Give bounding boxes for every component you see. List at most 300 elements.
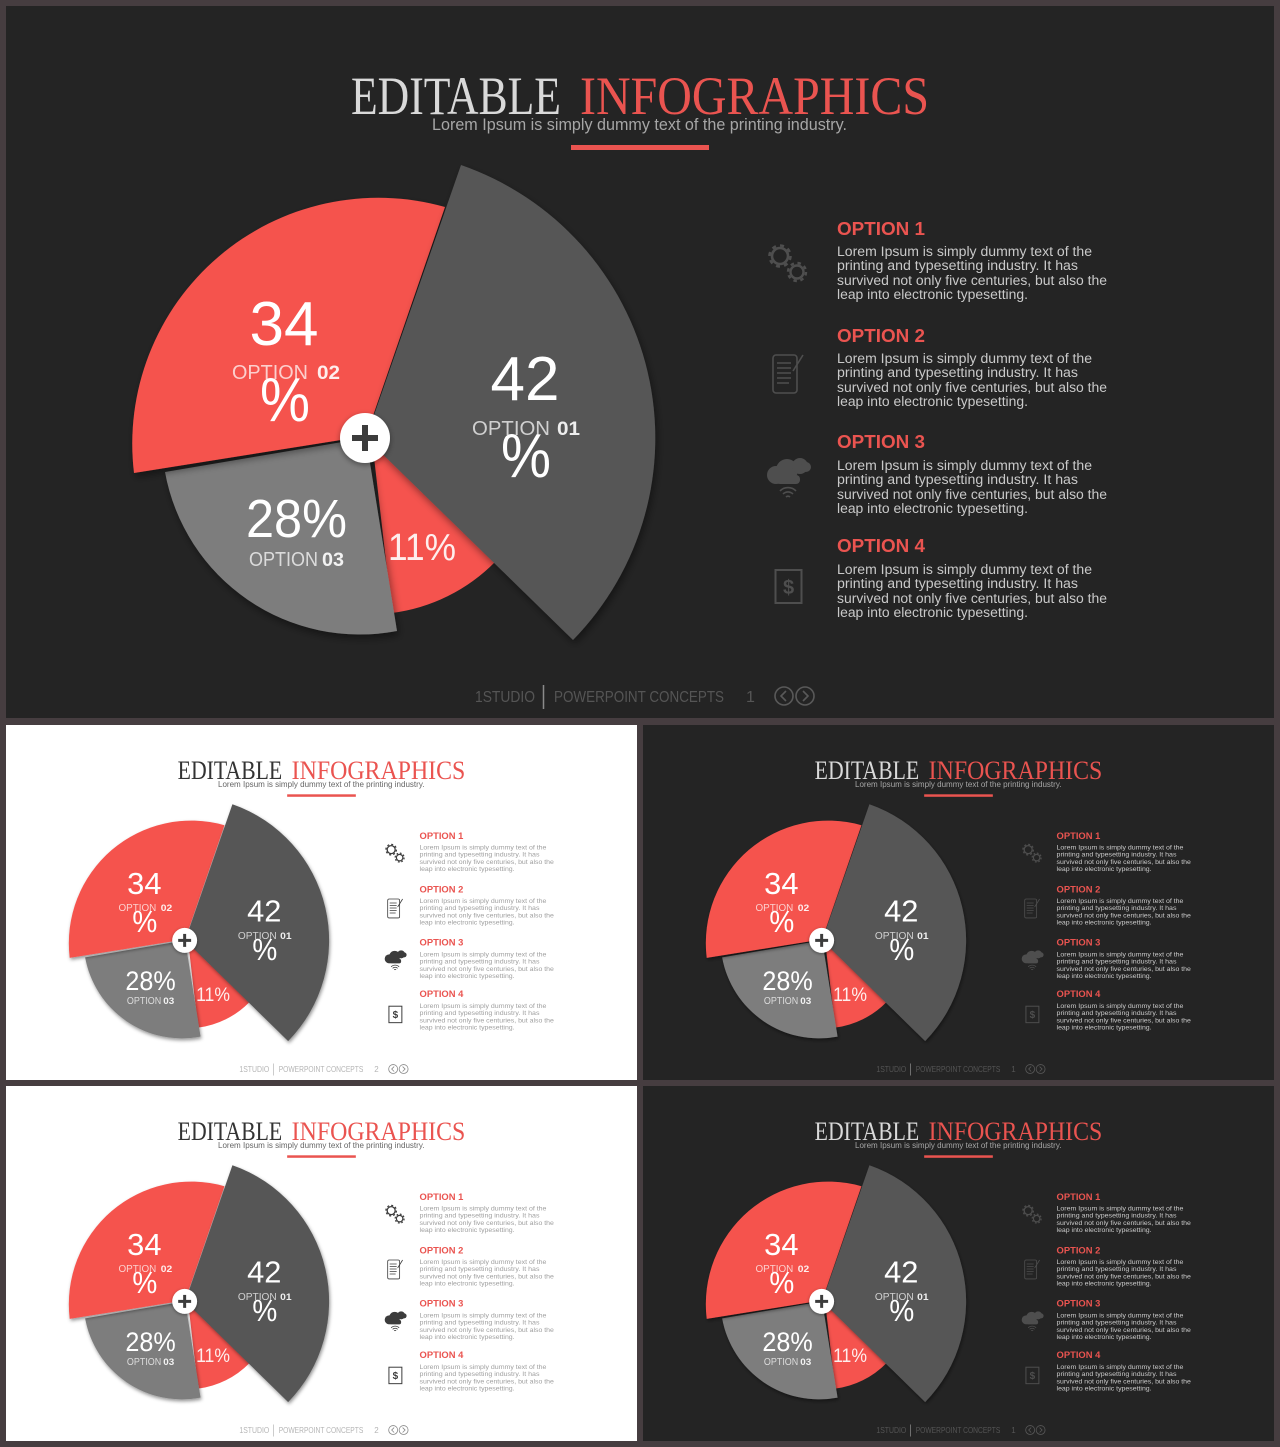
label: 11%: 11% bbox=[833, 1346, 867, 1367]
option 3 text: OPTION 3 bbox=[1057, 937, 1100, 947]
pie chart bbox=[706, 804, 966, 1041]
option 1 text bbox=[420, 831, 554, 873]
title bbox=[815, 755, 1102, 785]
label: 34% option 02 bbox=[232, 290, 340, 435]
option 2 text bbox=[837, 325, 1107, 409]
option 1 text: printing and typesetting industry. It has bbox=[1057, 852, 1177, 859]
footer bbox=[239, 1064, 408, 1076]
label: 28% option 03 bbox=[762, 1327, 813, 1368]
icon: gears bbox=[1023, 844, 1041, 862]
option 4 text: leap into electronic typesetting. bbox=[420, 1025, 515, 1032]
title: INFOGRAPHICS bbox=[292, 755, 465, 785]
label: 28% option 03: 28% bbox=[762, 966, 813, 996]
panel: white slide top left bbox=[6, 725, 637, 1080]
center plus button bbox=[809, 1289, 834, 1314]
label: 28% option 03: 28% bbox=[762, 1327, 813, 1357]
option 3 text bbox=[1057, 937, 1191, 980]
option 3 text: leap into electronic typesetting. bbox=[837, 501, 1028, 516]
option 2 text: OPTION 2 bbox=[1057, 885, 1100, 895]
label: 34% option 02: OPTION bbox=[755, 903, 793, 914]
title: EDITABLE bbox=[178, 1116, 282, 1146]
option 1 text: leap into electronic typesetting. bbox=[420, 866, 515, 873]
option 1 text: leap into electronic typesetting. bbox=[837, 287, 1028, 302]
icon: cloud and wifi bbox=[1022, 1311, 1044, 1331]
option 2 text bbox=[420, 885, 554, 926]
option 2 text: leap into electronic typesetting. bbox=[1057, 919, 1152, 926]
slice: option 02 bbox=[69, 821, 224, 958]
footer: 1STUDIO bbox=[876, 1426, 906, 1435]
option 4 text: Lorem Ipsum is simply dummy text of the bbox=[1057, 1364, 1184, 1371]
icon: cloud and wifi bbox=[767, 458, 811, 497]
option 4 text: survived not only five centuries, but also the bbox=[1057, 1018, 1191, 1025]
option 2 text: OPTION 2 bbox=[420, 885, 463, 895]
option 4 text: OPTION 4 bbox=[837, 535, 926, 556]
option 2 text: OPTION 2 bbox=[420, 1246, 463, 1256]
option 1 text bbox=[1057, 1192, 1191, 1234]
label: 28% option 03: OPTION bbox=[764, 1357, 798, 1368]
panel: white slide bottom left bbox=[6, 1086, 637, 1441]
icon: dollar document bbox=[1026, 1006, 1039, 1023]
label: 28% option 03: 03 bbox=[800, 996, 811, 1007]
label: 28% option 03 bbox=[125, 966, 176, 1007]
option 2 text: Lorem Ipsum is simply dummy text of the bbox=[420, 898, 547, 905]
footer bbox=[876, 1425, 1045, 1437]
label: 28% option 03: 03 bbox=[800, 1357, 811, 1368]
slice: option 01 bbox=[366, 165, 655, 640]
option 2 text: OPTION 2 bbox=[1057, 1246, 1100, 1256]
footer: POWERPOINT CONCEPTS bbox=[554, 689, 724, 706]
option 3 text bbox=[1057, 1298, 1191, 1341]
option 2 text: OPTION 2 bbox=[837, 325, 925, 346]
label: 28% option 03: OPTION bbox=[249, 549, 318, 571]
option 2 text: survived not only five centuries, but also the bbox=[420, 912, 554, 919]
label: 34% option 02: % bbox=[132, 904, 157, 939]
title: INFOGRAPHICS bbox=[580, 66, 929, 126]
label: 11%: 11% bbox=[388, 527, 456, 569]
label: 42% option 01: % bbox=[252, 932, 277, 967]
title: INFOGRAPHICS bbox=[292, 1116, 465, 1146]
label: 34% option 02: OPTION bbox=[755, 1264, 793, 1275]
title: INFOGRAPHICS bbox=[929, 755, 1102, 785]
option 1 text: leap into electronic typesetting. bbox=[1057, 1227, 1152, 1234]
icon: cloud and wifi bbox=[1022, 950, 1044, 970]
icon: document bbox=[773, 355, 803, 393]
title: EDITABLE bbox=[815, 1116, 919, 1146]
option 3 text: OPTION 3 bbox=[837, 431, 925, 452]
label: 42% option 01: OPTION bbox=[238, 931, 277, 942]
option 3 text bbox=[420, 1298, 554, 1341]
slice: option 03 bbox=[165, 438, 397, 635]
option 1 text: Lorem Ipsum is simply dummy text of the bbox=[1057, 1206, 1184, 1213]
label: 42% option 01 bbox=[238, 1254, 292, 1328]
label: 42% option 01: OPTION bbox=[238, 1292, 277, 1303]
icon: document bbox=[388, 899, 403, 918]
title: INFOGRAPHICS bbox=[929, 1116, 1102, 1146]
label: 34% option 02: 34 bbox=[127, 1227, 161, 1262]
title underline bbox=[287, 1155, 356, 1158]
option 3 text: survived not only five centuries, but also the bbox=[420, 1327, 554, 1334]
icon: dollar document: $ bbox=[1030, 1371, 1036, 1382]
center plus button bbox=[809, 928, 834, 953]
option 2 text: leap into electronic typesetting. bbox=[420, 1280, 515, 1287]
title: EDITABLE bbox=[178, 755, 282, 785]
slice: option 03 bbox=[722, 1301, 838, 1399]
option 4 text bbox=[1057, 1350, 1191, 1393]
option 1 text: survived not only five centuries, but also the bbox=[1057, 859, 1191, 866]
option 1 text: survived not only five centuries, but also the bbox=[420, 1220, 554, 1227]
label: 28% option 03: 03 bbox=[322, 550, 344, 571]
footer: 1 bbox=[1011, 1065, 1016, 1074]
slice: option 01 bbox=[822, 804, 966, 1041]
label: 34% option 02: % bbox=[769, 904, 794, 939]
subtitle: Lorem Ipsum is simply dummy text of the printing industry. bbox=[218, 779, 425, 789]
label: 42% option 01: 01 bbox=[917, 1292, 929, 1303]
slice: option 03 bbox=[85, 940, 201, 1038]
option 3 text: printing and typesetting industry. It has bbox=[420, 1319, 540, 1326]
label: 11%: 11% bbox=[196, 1346, 230, 1367]
option 2 text: Lorem Ipsum is simply dummy text of the bbox=[837, 351, 1092, 366]
slice: option 03 bbox=[722, 940, 838, 1038]
option 1 text: printing and typesetting industry. It has bbox=[420, 1213, 540, 1220]
footer: 1STUDIO bbox=[239, 1065, 269, 1074]
slice: option 03 bbox=[85, 1301, 201, 1399]
option 2 text: leap into electronic typesetting. bbox=[837, 394, 1028, 409]
option 2 text: printing and typesetting industry. It has bbox=[837, 365, 1078, 380]
option 1 text: survived not only five centuries, but also the bbox=[420, 859, 554, 866]
title underline bbox=[287, 794, 356, 797]
label: 42% option 01: 42 bbox=[884, 893, 918, 928]
option 4 text: leap into electronic typesetting. bbox=[1057, 1386, 1152, 1393]
icon: document bbox=[1025, 899, 1040, 918]
footer: 1 bbox=[746, 689, 755, 706]
option 4 text bbox=[837, 535, 1107, 620]
option 4 text: printing and typesetting industry. It has bbox=[1057, 1371, 1177, 1378]
option 3 text: OPTION 3 bbox=[420, 937, 463, 947]
option 2 text: printing and typesetting industry. It has bbox=[420, 905, 540, 912]
label: 42% option 01: 01 bbox=[280, 1292, 292, 1303]
label: 34% option 02: % bbox=[132, 1265, 157, 1300]
label: 34% option 02: 02 bbox=[317, 363, 340, 384]
slice: option 02 bbox=[706, 821, 861, 958]
pie chart bbox=[69, 804, 329, 1041]
option 4 text: survived not only five centuries, but also the bbox=[420, 1018, 554, 1025]
option 4 text: survived not only five centuries, but also the bbox=[420, 1379, 554, 1386]
label: 42% option 01: 42 bbox=[247, 893, 281, 928]
option 4 text: OPTION 4 bbox=[1057, 1350, 1101, 1360]
subtitle: Lorem Ipsum is simply dummy text of the printing industry. bbox=[855, 1140, 1062, 1150]
option 3 text: printing and typesetting industry. It has bbox=[837, 472, 1078, 487]
icon: document bbox=[388, 1260, 403, 1279]
label: 42% option 01: % bbox=[889, 932, 914, 967]
option 4 text: OPTION 4 bbox=[1057, 989, 1101, 999]
label: 34% option 02: 34 bbox=[764, 1227, 798, 1262]
footer: POWERPOINT CONCEPTS bbox=[916, 1065, 1000, 1074]
label: 42% option 01: OPTION bbox=[875, 1292, 914, 1303]
label: 34% option 02 bbox=[118, 866, 172, 939]
option 1 text: OPTION 1 bbox=[837, 218, 925, 239]
option 1 text: printing and typesetting industry. It has bbox=[420, 852, 540, 859]
icon: dollar document bbox=[389, 1367, 402, 1384]
option 4 text: Lorem Ipsum is simply dummy text of the bbox=[837, 562, 1092, 577]
subtitle: Lorem Ipsum is simply dummy text of the printing industry. bbox=[432, 115, 847, 134]
option 3 text: printing and typesetting industry. It has bbox=[1057, 1319, 1177, 1326]
option 1 text: OPTION 1 bbox=[1057, 831, 1100, 841]
footer: POWERPOINT CONCEPTS bbox=[916, 1426, 1000, 1435]
label: 42% option 01 bbox=[238, 893, 292, 967]
option 1 text: printing and typesetting industry. It has bbox=[1057, 1213, 1177, 1220]
option 2 text: leap into electronic typesetting. bbox=[1057, 1280, 1152, 1287]
option 1 text: Lorem Ipsum is simply dummy text of the bbox=[420, 1206, 547, 1213]
option 1 text: OPTION 1 bbox=[420, 1192, 463, 1202]
label: 42% option 01 bbox=[875, 1254, 929, 1328]
option 2 text: printing and typesetting industry. It has bbox=[420, 1266, 540, 1273]
option 4 text: OPTION 4 bbox=[420, 1350, 464, 1360]
option 3 text bbox=[420, 937, 554, 980]
option 1 text: OPTION 1 bbox=[1057, 1192, 1100, 1202]
footer: 1STUDIO bbox=[239, 1426, 269, 1435]
footer: 2 bbox=[374, 1426, 379, 1435]
footer: POWERPOINT CONCEPTS bbox=[279, 1426, 363, 1435]
label: 42% option 01: 01 bbox=[917, 931, 929, 942]
option 3 text: leap into electronic typesetting. bbox=[1057, 973, 1152, 980]
subtitle: Lorem Ipsum is simply dummy text of the printing industry. bbox=[218, 1140, 425, 1150]
label: 34% option 02: OPTION bbox=[118, 903, 156, 914]
option 3 text: leap into electronic typesetting. bbox=[1057, 1334, 1152, 1341]
label: 28% option 03: OPTION bbox=[127, 1357, 161, 1368]
subtitle: Lorem Ipsum is simply dummy text of the printing industry. bbox=[855, 779, 1062, 789]
title underline bbox=[924, 1155, 993, 1158]
option 3 text: survived not only five centuries, but also the bbox=[1057, 966, 1191, 973]
option 1 text: Lorem Ipsum is simply dummy text of the bbox=[420, 845, 547, 852]
title bbox=[178, 1116, 465, 1146]
icon: dollar document: $ bbox=[393, 1010, 399, 1021]
footer: POWERPOINT CONCEPTS bbox=[279, 1065, 363, 1074]
slice: 11% bbox=[188, 941, 249, 1028]
pie chart bbox=[132, 165, 655, 640]
option 2 text bbox=[1057, 1246, 1191, 1287]
title: EDITABLE bbox=[815, 755, 919, 785]
option 4 text: printing and typesetting industry. It has bbox=[837, 576, 1078, 591]
label: 42% option 01: 01 bbox=[557, 419, 580, 440]
option 3 text: leap into electronic typesetting. bbox=[420, 973, 515, 980]
label: 42% option 01: 42 bbox=[491, 345, 559, 414]
label: 34% option 02: 02 bbox=[798, 903, 809, 914]
icon: dollar document: $ bbox=[1030, 1010, 1036, 1021]
icon: gears bbox=[770, 246, 806, 281]
option 2 text: survived not only five centuries, but also the bbox=[420, 1273, 554, 1280]
icon: dollar document bbox=[776, 570, 802, 603]
option 1 text: survived not only five centuries, but also the bbox=[1057, 1220, 1191, 1227]
label: 28% option 03: 03 bbox=[163, 996, 174, 1007]
icon: cloud and wifi bbox=[385, 950, 407, 970]
title bbox=[351, 66, 929, 126]
option 3 text: survived not only five centuries, but also the bbox=[837, 487, 1107, 502]
label: 34% option 02: 02 bbox=[161, 903, 172, 914]
label: 42% option 01: % bbox=[252, 1293, 277, 1328]
option 1 text: Lorem Ipsum is simply dummy text of the bbox=[1057, 845, 1184, 852]
option 4 text: Lorem Ipsum is simply dummy text of the bbox=[1057, 1003, 1184, 1010]
option 1 text bbox=[1057, 831, 1191, 873]
label: 34% option 02 bbox=[755, 866, 809, 939]
label: 28% option 03: 28% bbox=[125, 966, 176, 996]
option 2 text: survived not only five centuries, but also the bbox=[1057, 1273, 1191, 1280]
footer bbox=[475, 685, 814, 709]
option 4 text bbox=[420, 1350, 554, 1393]
slice: option 02 bbox=[706, 1182, 861, 1319]
label: 34% option 02: 34 bbox=[127, 866, 161, 901]
footer: 1STUDIO bbox=[876, 1065, 906, 1074]
label: 34% option 02 bbox=[755, 1227, 809, 1300]
option 1 text: survived not only five centuries, but also the bbox=[837, 273, 1107, 288]
center plus button bbox=[340, 413, 390, 463]
label: 34% option 02: 34 bbox=[250, 290, 318, 359]
option 3 text: Lorem Ipsum is simply dummy text of the bbox=[1057, 951, 1184, 958]
label: 11%: 11% bbox=[196, 985, 230, 1006]
option 1 text: Lorem Ipsum is simply dummy text of the bbox=[837, 244, 1092, 259]
label: 28% option 03: OPTION bbox=[127, 996, 161, 1007]
label: 34% option 02: OPTION bbox=[118, 1264, 156, 1275]
option 1 text: leap into electronic typesetting. bbox=[1057, 866, 1152, 873]
label: 28% option 03: 28% bbox=[246, 489, 347, 549]
icon: dollar document: $ bbox=[393, 1371, 399, 1382]
title underline bbox=[924, 794, 993, 797]
option 1 text: OPTION 1 bbox=[420, 831, 463, 841]
option 4 text: survived not only five centuries, but also the bbox=[837, 591, 1107, 606]
label: 28% option 03: 28% bbox=[125, 1327, 176, 1357]
slice: option 01 bbox=[185, 1165, 329, 1402]
label: 34% option 02: 34 bbox=[764, 866, 798, 901]
option 4 text bbox=[1057, 989, 1191, 1032]
title bbox=[178, 755, 465, 785]
option 4 text bbox=[420, 989, 554, 1032]
label: 28% option 03: 03 bbox=[163, 1357, 174, 1368]
option 3 text: survived not only five centuries, but also the bbox=[420, 966, 554, 973]
option 1 text bbox=[837, 218, 1107, 302]
option 3 text: OPTION 3 bbox=[1057, 1298, 1100, 1308]
title bbox=[815, 1116, 1102, 1146]
option 3 text: Lorem Ipsum is simply dummy text of the bbox=[1057, 1312, 1184, 1319]
label: 34% option 02: % bbox=[769, 1265, 794, 1300]
option 2 text: leap into electronic typesetting. bbox=[420, 919, 515, 926]
panel: main dark slide bbox=[6, 6, 1274, 718]
label: 42% option 01: 01 bbox=[280, 931, 292, 942]
label: 42% option 01: % bbox=[889, 1293, 914, 1328]
option 3 text: leap into electronic typesetting. bbox=[420, 1334, 515, 1341]
label: 34% option 02: OPTION bbox=[232, 362, 308, 384]
slice: 11% bbox=[825, 1302, 886, 1389]
icon: dollar document bbox=[389, 1006, 402, 1023]
option 3 text: printing and typesetting industry. It has bbox=[420, 958, 540, 965]
option 2 text: Lorem Ipsum is simply dummy text of the bbox=[1057, 898, 1184, 905]
center plus button bbox=[172, 1289, 197, 1314]
label: 34% option 02: % bbox=[260, 366, 310, 435]
option 4 text: OPTION 4 bbox=[420, 989, 464, 999]
option 4 text: printing and typesetting industry. It has bbox=[1057, 1010, 1177, 1017]
label: 34% option 02: 02 bbox=[161, 1264, 172, 1275]
option 4 text: leap into electronic typesetting. bbox=[837, 605, 1028, 620]
option 4 text: leap into electronic typesetting. bbox=[420, 1386, 515, 1393]
option 3 text: printing and typesetting industry. It has bbox=[1057, 958, 1177, 965]
option 2 text: Lorem Ipsum is simply dummy text of the bbox=[1057, 1259, 1184, 1266]
footer: 2 bbox=[374, 1065, 379, 1074]
icon: dollar document: $ bbox=[783, 577, 794, 599]
label: 34% option 02: 02 bbox=[798, 1264, 809, 1275]
slice: 11% bbox=[188, 1302, 249, 1389]
option 4 text: Lorem Ipsum is simply dummy text of the bbox=[420, 1364, 547, 1371]
label: 42% option 01: 42 bbox=[884, 1254, 918, 1289]
footer bbox=[876, 1064, 1045, 1076]
label: 42% option 01: % bbox=[501, 422, 551, 491]
slice: option 01 bbox=[822, 1165, 966, 1402]
panel: dark slide bottom right bbox=[643, 1086, 1274, 1441]
option 4 text: leap into electronic typesetting. bbox=[1057, 1025, 1152, 1032]
label: 28% option 03 bbox=[246, 489, 347, 571]
option 3 text: Lorem Ipsum is simply dummy text of the bbox=[420, 1312, 547, 1319]
slice: option 01 bbox=[185, 804, 329, 1041]
option 1 text: printing and typesetting industry. It has bbox=[837, 258, 1078, 273]
option 2 text: survived not only five centuries, but also the bbox=[837, 380, 1107, 395]
option 3 text: OPTION 3 bbox=[420, 1298, 463, 1308]
label: 28% option 03 bbox=[762, 966, 813, 1007]
icon: gears bbox=[1023, 1205, 1041, 1223]
icon: gears bbox=[386, 844, 404, 862]
option 3 text: Lorem Ipsum is simply dummy text of the bbox=[420, 951, 547, 958]
icon: document bbox=[1025, 1260, 1040, 1279]
slice: option 02 bbox=[69, 1182, 224, 1319]
label: 42% option 01: 42 bbox=[247, 1254, 281, 1289]
label: 11%: 11% bbox=[833, 985, 867, 1006]
option 4 text: printing and typesetting industry. It has bbox=[420, 1371, 540, 1378]
label: 42% option 01 bbox=[875, 893, 929, 967]
slice: 11% bbox=[825, 941, 886, 1028]
label: 42% option 01: OPTION bbox=[472, 418, 550, 440]
slice: 11% bbox=[372, 440, 495, 613]
label: 42% option 01: OPTION bbox=[875, 931, 914, 942]
center plus button bbox=[172, 928, 197, 953]
footer bbox=[239, 1425, 408, 1437]
pie chart bbox=[69, 1165, 329, 1402]
label: 42% option 01 bbox=[472, 345, 580, 491]
option 2 text: Lorem Ipsum is simply dummy text of the bbox=[420, 1259, 547, 1266]
footer: 1STUDIO bbox=[475, 689, 535, 706]
option 2 text: printing and typesetting industry. It has bbox=[1057, 905, 1177, 912]
option 2 text bbox=[1057, 885, 1191, 926]
footer: 1 bbox=[1011, 1426, 1016, 1435]
icon: dollar document bbox=[1026, 1367, 1039, 1384]
option 4 text: Lorem Ipsum is simply dummy text of the bbox=[420, 1003, 547, 1010]
slice: option 02 bbox=[132, 198, 445, 473]
icon: gears bbox=[386, 1205, 404, 1223]
option 3 text: Lorem Ipsum is simply dummy text of the bbox=[837, 458, 1092, 473]
title: EDITABLE bbox=[351, 66, 561, 126]
option 2 text: survived not only five centuries, but also the bbox=[1057, 912, 1191, 919]
pie chart bbox=[706, 1165, 966, 1402]
option 2 text bbox=[420, 1246, 554, 1287]
option 4 text: survived not only five centuries, but also the bbox=[1057, 1379, 1191, 1386]
option 1 text bbox=[420, 1192, 554, 1234]
icon: cloud and wifi bbox=[385, 1311, 407, 1331]
option 1 text: leap into electronic typesetting. bbox=[420, 1227, 515, 1234]
label: 28% option 03: OPTION bbox=[764, 996, 798, 1007]
option 4 text: printing and typesetting industry. It has bbox=[420, 1010, 540, 1017]
title underline bbox=[571, 145, 709, 150]
panel: dark slide top right bbox=[643, 725, 1274, 1080]
option 3 text: survived not only five centuries, but also the bbox=[1057, 1327, 1191, 1334]
label: 28% option 03 bbox=[125, 1327, 176, 1368]
option 2 text: printing and typesetting industry. It has bbox=[1057, 1266, 1177, 1273]
option 3 text bbox=[837, 431, 1107, 516]
label: 34% option 02 bbox=[118, 1227, 172, 1300]
